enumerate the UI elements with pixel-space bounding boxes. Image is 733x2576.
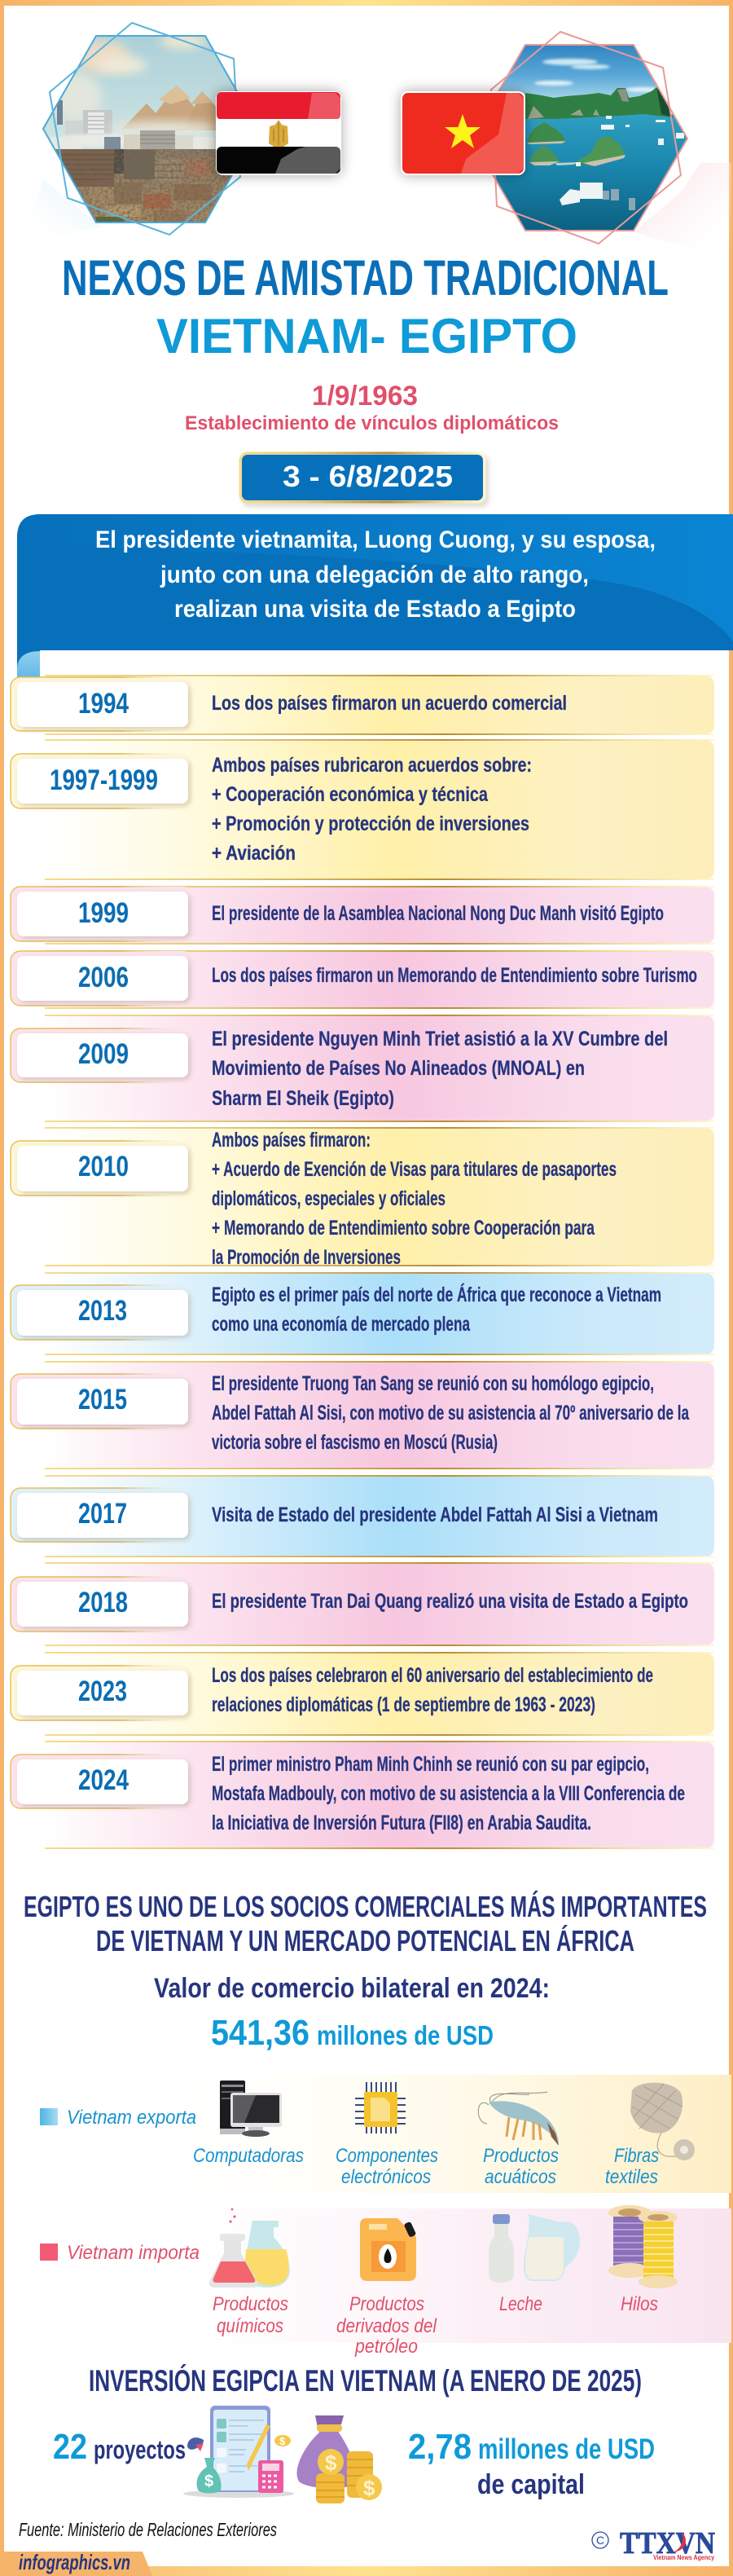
timeline row 2009: 2009 <box>78 1038 129 1070</box>
timeline row 2023: 2023 <box>78 1676 127 1707</box>
timeline row 2015 <box>11 1361 714 1469</box>
legend: Vietnam exporta: Vietnam exporta <box>67 2107 196 2129</box>
timeline row 1999 <box>11 886 714 945</box>
banner: visit summary: El presidente vietnamita, Luong Cuong, y su esposa, <box>95 526 656 553</box>
import labels: Leche <box>499 2293 542 2315</box>
stat: projects <box>53 2427 186 2467</box>
timeline row 2010: diplomáticos, especiales y oficiales <box>212 1187 446 1210</box>
icon: investment illustration <box>183 2406 382 2503</box>
export labels: Fibras <box>614 2145 659 2167</box>
icon: Egypt flag <box>216 91 341 175</box>
timeline row 2006: 2006 <box>78 962 129 993</box>
heading: trade partner <box>24 1890 707 1957</box>
import labels: Hilos <box>621 2293 658 2315</box>
stat: capital <box>408 2427 655 2500</box>
timeline row 2018 <box>11 1562 714 1646</box>
diplomatic ties date <box>185 381 559 434</box>
export labels <box>193 2145 659 2188</box>
timeline row 1994 <box>11 675 714 735</box>
timeline row 2010: Ambos países firmaron: <box>212 1129 371 1151</box>
timeline row 1994: 1994 <box>78 688 129 720</box>
timeline row 2010 <box>11 1127 714 1269</box>
trade value <box>154 1973 550 2053</box>
diplomatic ties date: Establecimiento de vínculos diplomáticos <box>185 412 559 434</box>
icon: chip <box>355 2082 406 2133</box>
icon: investment illustration: $ <box>363 2476 375 2500</box>
timeline row 2009 <box>11 1015 714 1122</box>
banner: visit summary <box>17 514 733 676</box>
banner: visit summary: junto con una delegación de alto rango, <box>160 561 589 588</box>
visit date badge <box>240 453 486 504</box>
icon: fuel can <box>360 2218 416 2281</box>
footer bar <box>0 2550 733 2576</box>
icon: shrimp <box>478 2092 559 2146</box>
logo: TTXVN: Vietnam News Agency <box>653 2554 714 2561</box>
export labels: textiles <box>605 2166 658 2188</box>
header: Egypt photo in hexagon <box>40 21 241 236</box>
visit date badge: 3 - 6/8/2025 <box>283 460 453 493</box>
timeline row 2013: como una economía de mercado plena <box>212 1313 471 1336</box>
stat: capital: millones de USD <box>478 2433 655 2465</box>
title <box>62 250 669 363</box>
timeline row 2013 <box>11 1272 714 1355</box>
timeline row 2024: 2024 <box>78 1764 129 1796</box>
stat: projects: 22 <box>53 2427 87 2467</box>
timeline row 2017: 2017 <box>78 1498 127 1530</box>
icon: computer <box>220 2081 282 2137</box>
icon: thread spools <box>608 2205 678 2288</box>
website: infographics.vn <box>19 2550 130 2574</box>
import labels: químicos <box>217 2315 283 2337</box>
header: Vietnam photo in hexagon <box>468 32 731 253</box>
import labels: Productos <box>349 2293 424 2315</box>
trade value: 541,36 <box>211 2013 309 2053</box>
panel: Vietnam exports <box>40 2075 731 2193</box>
timeline row 2024 <box>11 1741 714 1849</box>
export labels: Productos <box>483 2145 559 2167</box>
diplomatic ties date: 1/9/1963 <box>312 381 418 412</box>
timeline row 1997-1999: + Aviación <box>212 842 296 865</box>
stat: capital: 2,78 <box>408 2427 472 2467</box>
icon: milk <box>489 2214 580 2283</box>
timeline row 2023 <box>11 1652 714 1736</box>
source note: Fuente: Ministerio de Relaciones Exteriores <box>19 2519 277 2540</box>
icon: investment illustration: $ <box>325 2451 337 2475</box>
export labels: Computadoras <box>193 2145 304 2167</box>
timeline row 1997-1999: + Cooperación económica y técnica <box>212 783 489 806</box>
import labels: Productos <box>213 2293 288 2315</box>
import labels: petróleo <box>354 2336 418 2358</box>
trade value: millones de USD <box>317 2020 494 2050</box>
timeline row 1997-1999: 1997-1999 <box>50 764 158 796</box>
import labels <box>213 2293 658 2358</box>
export labels: Componentes <box>336 2145 438 2167</box>
timeline row 2015: victoria sobre el fascismo en Moscú (Rusia) <box>212 1431 498 1454</box>
banner: visit summary: realizan una visita de Estado a Egipto <box>174 596 576 623</box>
timeline row 1997-1999 <box>11 739 714 880</box>
timeline row 1997-1999: Ambos países rubricaron acuerdos sobre: <box>212 754 532 777</box>
icon: Vietnam flag <box>401 91 525 175</box>
timeline row 2017 <box>11 1475 714 1557</box>
timeline row 2006 <box>11 950 714 1009</box>
logo: TTXVN: TTXVN <box>620 2526 715 2561</box>
logo: TTXVN: C <box>596 2534 604 2547</box>
icon: twine spool <box>630 2083 695 2160</box>
export labels: acuáticos <box>485 2166 556 2188</box>
timeline row 2009: Movimiento de Países No Alineados (MNOAL) en <box>212 1057 585 1080</box>
stat: projects: proyectos <box>94 2435 186 2464</box>
timeline row 2010: 2010 <box>78 1151 129 1182</box>
timeline row 2018: 2018 <box>78 1587 128 1618</box>
timeline row 1997-1999: + Promoción y protección de inversiones <box>212 812 529 835</box>
icon: investment illustration: $ <box>279 2435 286 2447</box>
timeline row 2010: la Promoción de Inversiones <box>212 1246 401 1269</box>
stat: capital: de capital <box>477 2469 585 2500</box>
timeline row 1994: Los dos países firmaron un acuerdo comercial <box>212 692 567 715</box>
icon: investment illustration: $ <box>204 2473 213 2490</box>
timeline row 1999: 1999 <box>78 897 129 929</box>
logo: TTXVN <box>592 2526 715 2561</box>
trade value: Valor de comercio bilateral en 2024: <box>154 1973 550 2004</box>
banner fold <box>17 651 40 678</box>
export labels: electrónicos <box>341 2166 431 2188</box>
import labels: derivados del <box>336 2315 437 2337</box>
timeline row 2015: 2015 <box>78 1384 127 1416</box>
timeline row 2009: Sharm El Sheik (Egipto) <box>212 1087 394 1110</box>
panel: Vietnam imports <box>40 2205 731 2358</box>
icon: flasks <box>209 2208 290 2288</box>
legend: Vietnam importa: Vietnam importa <box>67 2242 200 2264</box>
timeline row 2013: 2013 <box>78 1295 127 1327</box>
title: VIETNAM- EGIPTO <box>156 309 577 363</box>
